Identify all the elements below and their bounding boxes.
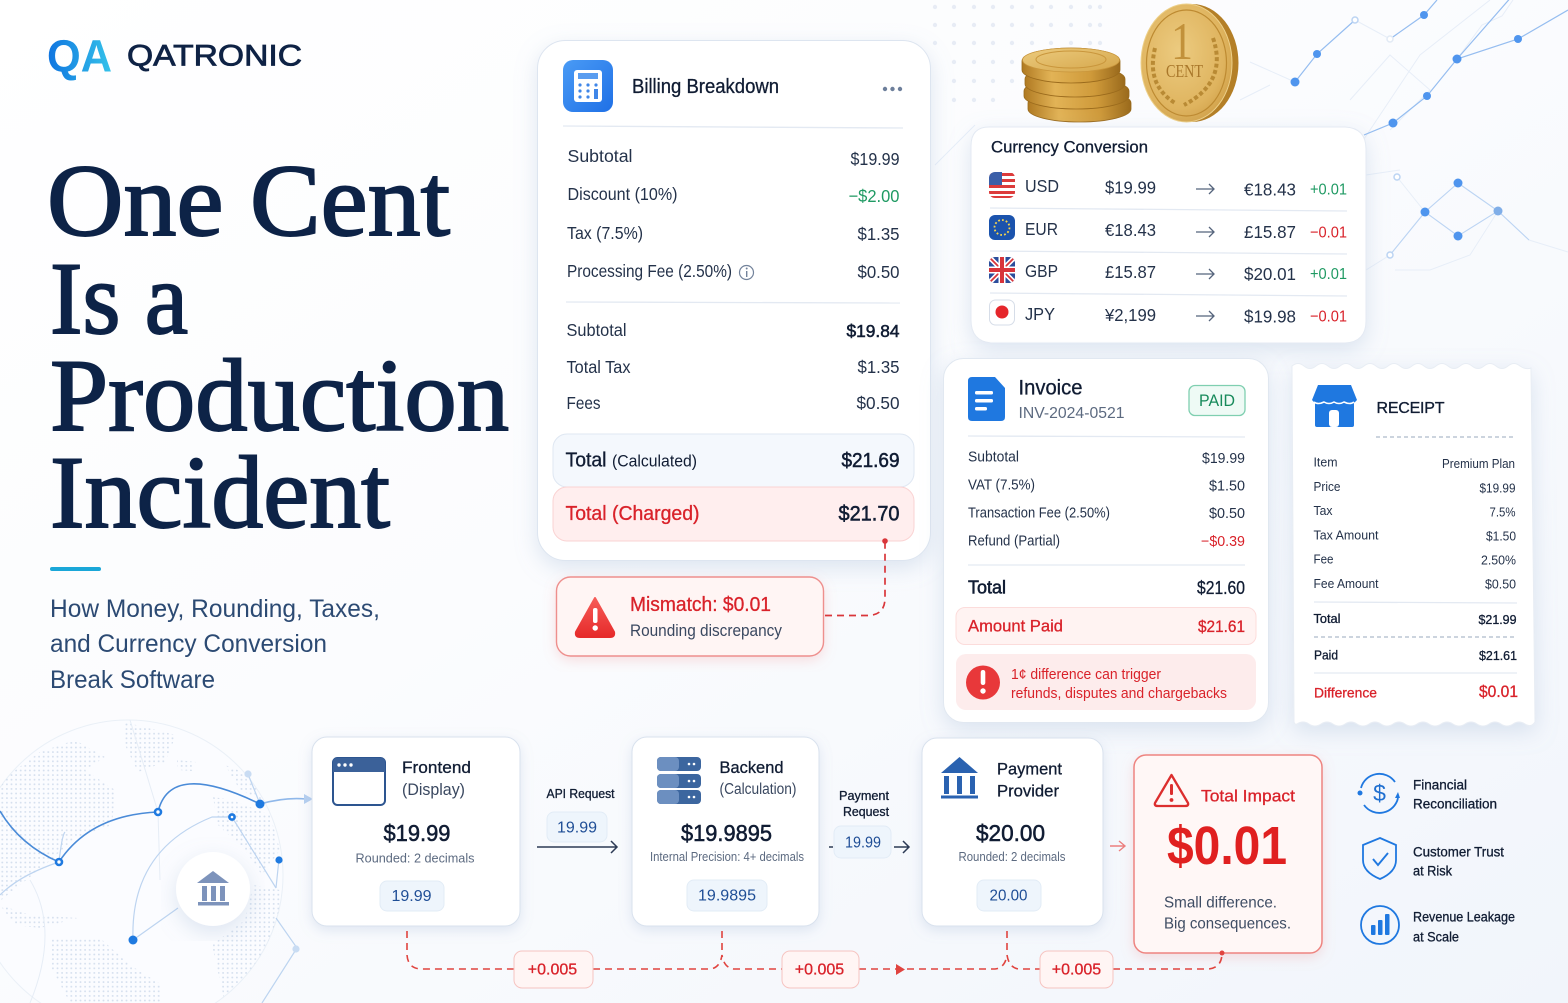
rows: Difference bbox=[1314, 684, 1377, 700]
rows: $1.35 bbox=[858, 357, 900, 377]
flag: US bbox=[989, 172, 1015, 198]
rows: $19.99 bbox=[1480, 482, 1516, 496]
total charged row: $21.70 bbox=[838, 502, 900, 526]
subtitle: How Money, Rounding, Taxes, bbox=[50, 595, 380, 623]
payment request step: Payment bbox=[839, 789, 890, 803]
label bbox=[720, 758, 796, 798]
warning note bbox=[956, 654, 1256, 710]
icon: bank in circle bbox=[176, 852, 250, 926]
row EUR: EUR bbox=[1025, 219, 1058, 239]
row GBP: £15.87 bbox=[1105, 262, 1156, 282]
flag: EU bbox=[989, 215, 1015, 240]
row JPY: $19.98 bbox=[1244, 306, 1296, 326]
rows: Tax Amount bbox=[1314, 528, 1379, 542]
title accent bar bbox=[50, 567, 101, 571]
amount paid bbox=[956, 608, 1256, 644]
rows: Premium Plan bbox=[1442, 457, 1515, 471]
flag: JP bbox=[990, 300, 1014, 325]
panel: invoice bbox=[944, 358, 1268, 722]
panel: total impact: Total Impact bbox=[1201, 786, 1295, 806]
rows: 7.5% bbox=[1490, 506, 1516, 520]
icon: bar chart circle bbox=[1361, 906, 1399, 944]
chip +0.005 bbox=[1040, 951, 1113, 988]
total charged row bbox=[553, 487, 914, 541]
badge: paid: PAID bbox=[1199, 392, 1235, 410]
logo wordmark: QATRONIC bbox=[127, 40, 302, 72]
single one cent coin: CENT bbox=[1166, 61, 1203, 81]
chip +0.005 bbox=[514, 951, 593, 988]
subtitle bbox=[50, 595, 380, 694]
total calculated row bbox=[553, 434, 914, 487]
row GBP: $20.01 bbox=[1244, 264, 1296, 284]
payment request step bbox=[829, 789, 909, 858]
subtitle: and Currency Conversion bbox=[50, 630, 327, 658]
rows bbox=[566, 146, 900, 413]
title: Incident bbox=[50, 436, 390, 550]
icon: shield check bbox=[1363, 838, 1396, 879]
icon: warning triangle bbox=[576, 598, 614, 637]
rows bbox=[1314, 456, 1518, 701]
rows: $19.99 bbox=[1202, 451, 1245, 467]
chip +0.005: +0.005 bbox=[528, 962, 577, 978]
coin stack bbox=[1022, 48, 1131, 122]
panel: total impact: Big consequences. bbox=[1164, 916, 1291, 932]
menu dots bbox=[883, 87, 902, 91]
globe illustration bbox=[0, 720, 313, 1003]
row GBP: +0.01 bbox=[1310, 266, 1347, 283]
icon: browser window bbox=[333, 758, 385, 805]
heading: INV-2024-0521 bbox=[1018, 405, 1125, 422]
row USD: +0.01 bbox=[1310, 182, 1347, 198]
rows: Transaction Fee (2.50%) bbox=[968, 506, 1110, 522]
label: Provider bbox=[997, 782, 1059, 800]
title: Production bbox=[50, 339, 509, 453]
rows: Item bbox=[1314, 456, 1338, 470]
panel: receipt bbox=[1292, 364, 1535, 726]
icon: bank bbox=[941, 757, 978, 798]
subtitle: Break Software bbox=[50, 666, 215, 694]
impact: financial reconciliation: Financial bbox=[1413, 778, 1467, 792]
chip: 19.99 bbox=[391, 888, 432, 905]
globe arrow to frontend bbox=[260, 794, 313, 804]
impact: financial reconciliation: Reconciliation bbox=[1413, 796, 1497, 812]
row GBP bbox=[989, 257, 1347, 284]
payment request step: Request bbox=[843, 805, 890, 819]
callout: mismatch: Rounding discrepancy bbox=[630, 622, 783, 640]
arrows bbox=[1196, 184, 1214, 321]
rows: $1.50 bbox=[1486, 530, 1516, 544]
callout: mismatch bbox=[556, 538, 888, 656]
rows: $21.61 bbox=[1479, 649, 1517, 663]
panel: billing breakdown bbox=[538, 40, 930, 560]
chip: 20.00 bbox=[990, 888, 1028, 904]
icon: alert bbox=[966, 666, 1000, 700]
label bbox=[997, 760, 1062, 800]
rows: $19.84 bbox=[846, 321, 900, 341]
flow card: backend: $19.9895 bbox=[681, 820, 772, 846]
heading: RECEIPT bbox=[1376, 400, 1445, 417]
arrow bbox=[829, 841, 909, 853]
flow card: payment provider: $20.00 bbox=[976, 820, 1045, 846]
rows: $1.50 bbox=[1209, 478, 1245, 494]
heading bbox=[1018, 376, 1125, 422]
rows: Total bbox=[1314, 612, 1340, 626]
panel: total impact: Small difference. bbox=[1164, 894, 1277, 912]
warning note: 1¢ difference can trigger bbox=[1011, 667, 1161, 683]
chip: 19.9895 bbox=[698, 888, 756, 904]
heading: Billing Breakdown bbox=[632, 76, 779, 98]
chip +0.005: +0.005 bbox=[795, 962, 844, 978]
rows: Discount (10%) bbox=[568, 184, 678, 204]
label: Backend bbox=[720, 758, 784, 777]
flow card: frontend: Rounded: 2 decimals bbox=[356, 850, 475, 866]
rows: Price bbox=[1314, 480, 1341, 494]
rows: Processing Fee (2.50%) bbox=[567, 261, 732, 281]
network chart background bbox=[935, 0, 1568, 270]
rows: −$2.00 bbox=[848, 186, 900, 206]
rows: VAT (7.5%) bbox=[968, 478, 1035, 494]
impact: revenue leakage: at Scale bbox=[1413, 930, 1459, 944]
chip bbox=[687, 880, 767, 911]
flow card: frontend: $19.99 bbox=[384, 820, 450, 846]
rows: $0.50 bbox=[856, 393, 900, 413]
impact: customer trust: at Risk bbox=[1413, 864, 1452, 878]
info icon bbox=[740, 266, 754, 280]
impact: customer trust bbox=[1363, 838, 1504, 879]
icon: document bbox=[968, 377, 1005, 421]
flow card: payment provider: Rounded: 2 decimals bbox=[958, 850, 1066, 864]
chip bbox=[977, 880, 1041, 911]
rows: Refund (Partial) bbox=[968, 534, 1060, 550]
api request step: API Request bbox=[546, 787, 615, 801]
chip: 19.99 bbox=[557, 820, 597, 836]
rows: $0.50 bbox=[858, 262, 900, 282]
row GBP: GBP bbox=[1025, 261, 1058, 281]
total calculated row: (Calculated) bbox=[612, 452, 697, 470]
rows: Paid bbox=[1314, 648, 1338, 662]
row JPY: JPY bbox=[1025, 304, 1055, 324]
rows: Total Tax bbox=[566, 357, 631, 377]
chip +0.005 bbox=[782, 951, 859, 988]
badge: paid bbox=[1189, 386, 1245, 416]
flag: UK bbox=[989, 257, 1015, 283]
rows: Fee Amount bbox=[1314, 577, 1379, 591]
row JPY: −0.01 bbox=[1310, 308, 1347, 326]
logo mark QA: QA bbox=[47, 30, 112, 82]
row EUR: £15.87 bbox=[1244, 222, 1296, 242]
rows: Fee bbox=[1314, 552, 1334, 566]
rows: Tax bbox=[1314, 504, 1333, 518]
heading: Currency Conversion bbox=[991, 138, 1148, 156]
rows: $0.01 bbox=[1479, 683, 1518, 701]
rows: Subtotal bbox=[968, 450, 1019, 466]
panel: total impact bbox=[1134, 755, 1322, 953]
amount paid: $21.61 bbox=[1198, 617, 1245, 636]
row EUR: €18.43 bbox=[1105, 220, 1156, 240]
chip: 19.99 bbox=[845, 834, 881, 852]
rows: Subtotal bbox=[566, 320, 626, 340]
rows: $1.35 bbox=[858, 224, 900, 244]
label: Frontend bbox=[402, 758, 471, 777]
icon: dollar cycle: $ bbox=[1373, 780, 1386, 806]
row JPY: ¥2,199 bbox=[1104, 305, 1156, 325]
rows: $21.99 bbox=[1478, 613, 1517, 627]
rows: $0.50 bbox=[1209, 506, 1245, 522]
row JPY bbox=[990, 300, 1347, 326]
row USD: USD bbox=[1025, 176, 1059, 196]
row EUR: −0.01 bbox=[1310, 224, 1347, 242]
title: Is a bbox=[50, 242, 188, 356]
callout: mismatch: Mismatch: $0.01 bbox=[630, 594, 771, 616]
impact: revenue leakage: Revenue Leakage bbox=[1413, 910, 1515, 924]
icon: store bbox=[1312, 385, 1357, 427]
total bbox=[968, 578, 1245, 598]
label: (Display) bbox=[402, 781, 465, 799]
icon: calculator bbox=[563, 60, 613, 112]
background dot grid bbox=[933, 5, 1102, 102]
rows bbox=[968, 450, 1245, 550]
icon: server bbox=[657, 757, 701, 804]
row USD: €18.43 bbox=[1244, 180, 1296, 200]
rows: −$0.39 bbox=[1201, 534, 1245, 550]
panel: total impact: $0.01 bbox=[1167, 816, 1287, 876]
api request step bbox=[537, 787, 617, 853]
impact: customer trust: Customer Trust bbox=[1413, 844, 1504, 860]
flow card: backend bbox=[632, 737, 819, 926]
dashed error accumulation line bbox=[407, 931, 1224, 988]
total calculated row: Total bbox=[566, 450, 606, 472]
rows: Tax (7.5%) bbox=[567, 223, 643, 243]
title: One Cent bbox=[47, 144, 450, 258]
impact: financial reconciliation bbox=[1358, 774, 1497, 813]
logo bbox=[47, 30, 302, 82]
rows: $0.50 bbox=[1485, 578, 1516, 592]
row EUR bbox=[989, 215, 1347, 242]
title bbox=[47, 144, 509, 550]
row USD bbox=[989, 172, 1347, 200]
total calculated row: $21.69 bbox=[842, 450, 900, 472]
label: (Calculation) bbox=[720, 781, 796, 798]
arrow bbox=[537, 841, 617, 853]
rows: Subtotal bbox=[568, 146, 632, 166]
label bbox=[402, 758, 471, 799]
total charged row: Total (Charged) bbox=[566, 503, 700, 525]
single one cent coin bbox=[1141, 4, 1238, 122]
single one cent coin: 1 bbox=[1171, 13, 1193, 71]
flow card: backend: Internal Precision: 4+ decimals bbox=[650, 850, 804, 864]
heading: Invoice bbox=[1018, 376, 1082, 400]
flow card: payment provider bbox=[922, 738, 1103, 926]
coins bbox=[1022, 4, 1238, 122]
arrow to total impact bbox=[1110, 841, 1125, 851]
total: $21.60 bbox=[1197, 578, 1245, 598]
rows: $19.99 bbox=[850, 149, 900, 169]
rows: 2.50% bbox=[1481, 554, 1516, 568]
rows: Fees bbox=[566, 393, 601, 413]
panel: currency conversion bbox=[971, 127, 1366, 343]
label: Payment bbox=[997, 760, 1062, 778]
amount paid: Amount Paid bbox=[968, 618, 1063, 636]
total: Total bbox=[968, 578, 1006, 598]
chip +0.005: +0.005 bbox=[1052, 962, 1101, 978]
impact: revenue leakage bbox=[1361, 906, 1515, 944]
chip bbox=[380, 881, 444, 911]
icon: warning outline bbox=[1155, 775, 1188, 806]
connector to total charged bbox=[825, 538, 888, 616]
flow card: frontend bbox=[312, 737, 520, 926]
row USD: $19.99 bbox=[1105, 178, 1156, 198]
warning note: refunds, disputes and chargebacks bbox=[1011, 686, 1227, 702]
